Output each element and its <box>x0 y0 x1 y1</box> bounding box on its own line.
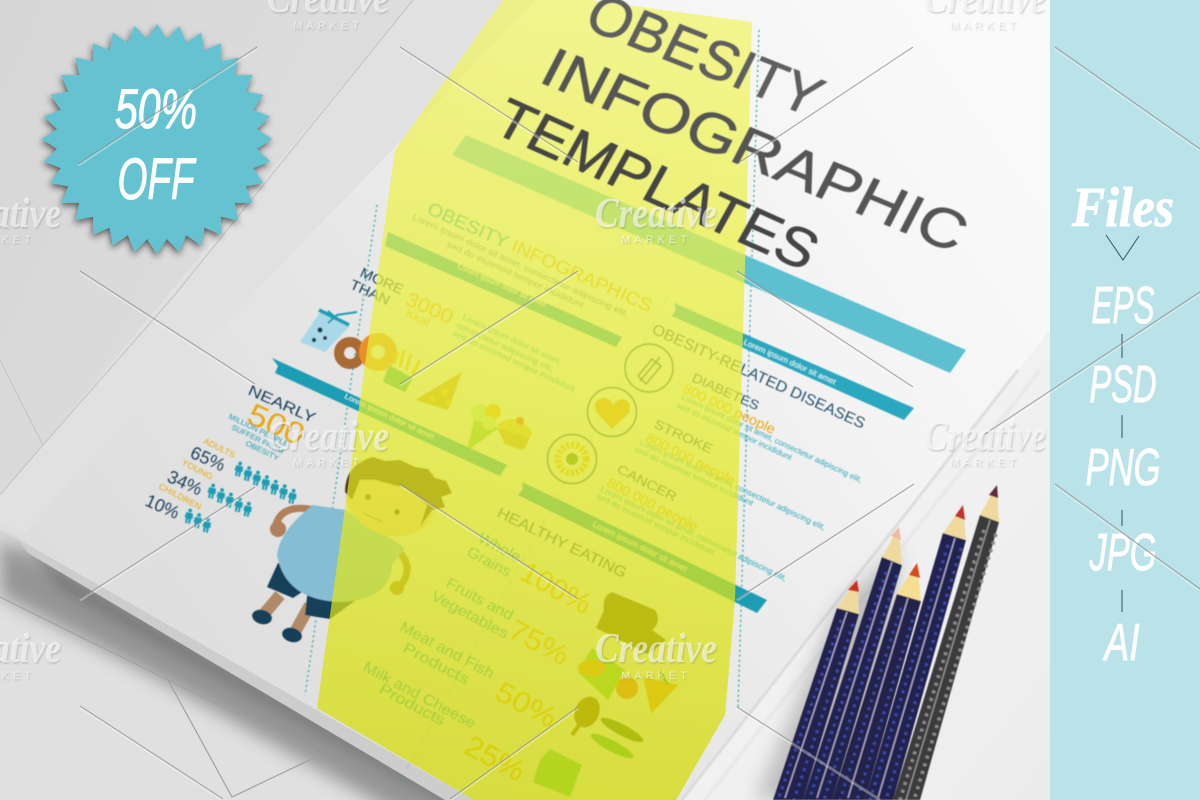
file format list: JPG <box>1089 524 1156 582</box>
title: INFOGRAPHIC <box>531 36 978 264</box>
pencil shadow <box>755 545 900 800</box>
disease: diabetes: Lorem ipsum dolor sit amet, consectetur adipiscing elit, <box>680 393 863 484</box>
icon: fish <box>588 714 646 762</box>
watermark: creative market: Creative <box>924 414 1046 460</box>
icon: pizza <box>415 372 462 410</box>
pencil: navy 3 <box>832 563 921 800</box>
discount badge <box>42 24 272 254</box>
calories block: Lorem ipsum dolor sit amet, <box>461 313 563 366</box>
stats: nearly 500 million: MILLION PEOPLE <box>227 412 290 449</box>
stats: nearly 500 million <box>227 382 318 463</box>
pencil: navy 4 <box>865 505 966 800</box>
pencil: navy 1 <box>773 580 859 800</box>
watermark: creative market: MARKET <box>293 457 363 469</box>
disease: cancer: CANCER <box>615 461 679 504</box>
stats: adults, young, children: YOUNG <box>180 457 215 482</box>
disease: stroke: 800 000 people <box>644 429 738 488</box>
eating row: fruits and vegetables: 75% <box>503 614 574 672</box>
eating row: whole grains: Grains <box>464 544 514 581</box>
eating row: milk and cheese: Milk and Cheese <box>360 659 478 732</box>
icon: fries <box>383 350 420 392</box>
disease: cancer: 800 000 people <box>605 474 701 534</box>
eating row: fruits and vegetables <box>428 575 574 672</box>
icon: chicken leg <box>569 692 605 735</box>
eating row: milk and cheese <box>360 659 530 788</box>
watermark: creative market: Creative <box>595 191 717 237</box>
calories block: THAN <box>348 276 393 308</box>
watermark: creative market: MARKET <box>621 670 691 682</box>
icon: milk carton <box>533 749 582 797</box>
file format list: Files <box>1071 177 1174 239</box>
file format list: PNG <box>1086 439 1160 497</box>
watermark: creative market: Creative <box>595 626 717 672</box>
badge text <box>115 77 197 212</box>
band: healthy eating <box>518 482 767 613</box>
file format list: PSD <box>1090 356 1156 414</box>
disease: diabetes: DIABETES <box>690 370 762 413</box>
calories block: MORE <box>358 264 406 297</box>
band: obesity related <box>672 303 914 420</box>
infographic content on sheet <box>142 30 966 797</box>
eating row: milk and cheese: 25% <box>459 730 530 788</box>
chevron and separators <box>1106 235 1139 612</box>
disease: stroke: Lorem ipsum dolor sit amet, consectetur adipiscing elit, <box>638 438 827 532</box>
watermark: creative market <box>0 0 1046 682</box>
icon: cupcake <box>497 417 532 450</box>
watermark: creative market: Creative <box>267 414 389 460</box>
dotted guide lines <box>305 30 759 707</box>
calories block: 3000 <box>402 288 457 329</box>
band: healthy eating: Lorem ipsum dolor sit amet <box>591 520 689 574</box>
band: teal middle: Lorem ipsum dolor sit amet <box>343 392 437 442</box>
title <box>484 0 978 282</box>
intro text: Lorem ipsum dolor sit amet, consectetur adipiscing elit, <box>411 212 630 319</box>
watermark: creative market: MARKET <box>950 20 1020 32</box>
watermark: creative market: MARKET <box>293 20 363 32</box>
pencil: navy 2 <box>803 527 902 800</box>
calories block <box>348 264 577 394</box>
file format list: AI <box>1102 614 1140 672</box>
eating row: whole grains <box>464 530 597 621</box>
pencil: grey <box>893 485 999 800</box>
badge text: OFF <box>118 147 197 212</box>
file format list: EPS <box>1092 277 1155 335</box>
icon: drink <box>300 310 357 352</box>
stats: nearly 500 million: SUFFER FROM <box>230 423 285 456</box>
eating row: meat and fish: Products <box>400 640 472 688</box>
pencils <box>755 485 999 800</box>
envelope lines <box>0 597 320 797</box>
eating row: fruits and vegetables: Fruits and <box>443 575 516 624</box>
heading: healthy eating: HEALTHY EATING <box>494 504 629 582</box>
eating row: milk and cheese: Products <box>376 681 448 729</box>
band: teal middle <box>272 358 507 476</box>
paper thickness edge <box>18 539 480 800</box>
stats: nearly 500 million: 500 <box>242 396 310 452</box>
stats: nearly 500 million: NEARLY <box>245 382 318 427</box>
yellow translucent overlay <box>317 0 752 800</box>
stats: adults, young, children: 10% <box>142 490 182 523</box>
file format list <box>1071 177 1174 672</box>
stats: adults, young, children: CHILDREN <box>157 481 203 512</box>
watermark: creative market: MARKET <box>621 234 691 246</box>
heading: obesity infographics: OBESITY INFOGRAPHICS <box>424 198 655 316</box>
icon row: people 10% <box>180 506 216 535</box>
icon: bread <box>596 592 666 654</box>
disease: cancer: sed do eiusmod tempor incididunt <box>595 492 717 557</box>
band: left column <box>385 232 622 347</box>
icon row: people 65% <box>230 459 302 506</box>
right side panel <box>1050 0 1200 800</box>
icon row: people 34% <box>203 481 257 519</box>
main title band <box>452 135 966 373</box>
paper shadow <box>0 540 480 800</box>
calories block: consectetur adipiscing elit, <box>455 321 555 374</box>
eating row: meat and fish: 50% <box>490 676 562 735</box>
icon: heart circle <box>588 388 636 436</box>
watermark: creative market: MARKET <box>950 457 1020 469</box>
disease: stroke: sed do eiusmod tempor incididunt <box>633 445 756 508</box>
icon: vegetables <box>578 648 679 718</box>
disease: diabetes: 800 000 people <box>681 380 778 437</box>
eating row: whole grains: 100% <box>515 556 597 621</box>
icon: ice cream <box>467 404 501 451</box>
stats: adults, young, children: 34% <box>164 466 205 499</box>
heading: obesity related diseases: OBESITY-RELATED DISEASES <box>649 321 868 432</box>
dashed column divider <box>395 297 668 790</box>
stats: nearly 500 million: OBESITY <box>244 439 280 463</box>
icon: cancer circle <box>548 434 596 484</box>
band: obesity related: Lorem ipsum dolor sit amet <box>742 338 838 387</box>
eating row: meat and fish: Meat and Fish <box>397 619 497 682</box>
disease: cancer: Lorem ipsum dolor sit amet, consectetur adipiscing elit, <box>599 485 788 583</box>
eating row: fruits and vegetables: Vegetables <box>428 588 511 642</box>
intro text: sed do eiusmod tempor incididunt <box>445 239 586 310</box>
stats: adults, young, children <box>142 436 237 523</box>
icon: syringe circle <box>625 344 673 392</box>
eating row: whole grains: Whole <box>475 530 524 566</box>
band: left column: Lorem ipsum dolor sit amet <box>456 262 548 309</box>
starburst <box>42 24 272 254</box>
calories block: sed do eiusmod tempor incididunt <box>451 329 577 394</box>
stats: adults, young, children: 65% <box>187 442 228 475</box>
eating row: meat and fish <box>397 619 562 735</box>
disease: diabetes: sed do eiusmod tempor incididunt <box>675 401 794 462</box>
stats: adults, young, children: ADULTS <box>202 436 237 460</box>
title: TEMPLATES <box>484 86 830 282</box>
calories block: Kkal <box>404 308 431 329</box>
badge text: 50% <box>115 77 197 140</box>
icon: donuts <box>339 339 391 365</box>
disease: stroke: STROKE <box>652 416 716 457</box>
illustration: overweight boy <box>251 452 452 644</box>
